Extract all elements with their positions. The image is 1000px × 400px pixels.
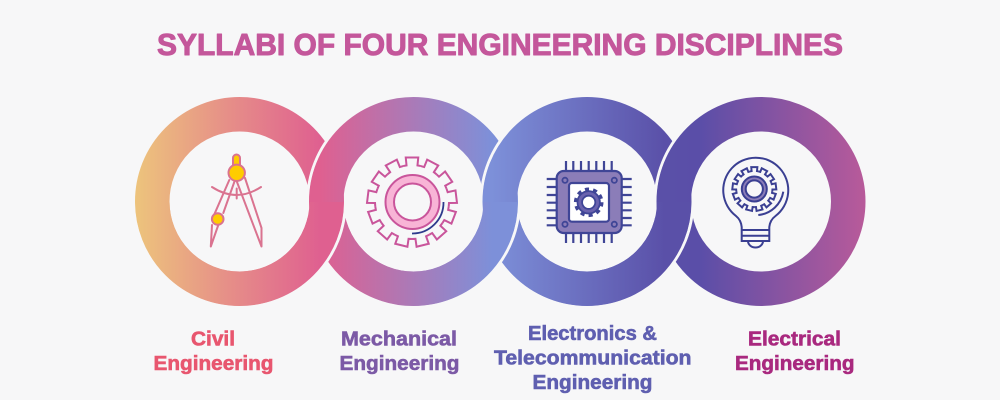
label: civil engineering: [154, 328, 274, 375]
icon: gear: [367, 157, 457, 247]
label: mechanical engineering: Mechanical: [341, 328, 457, 350]
label: electronics and telecommunication engineering: Telecommunication: [494, 348, 692, 370]
icon: drafting compass: [211, 154, 262, 246]
label: electronics and telecommunication engineering: Electronics &: [528, 323, 657, 345]
label: electronics and telecommunication engineering: [494, 323, 692, 394]
ring: electronics engineering: [481, 96, 693, 307]
label: electronics and telecommunication engineering: Engineering: [532, 372, 652, 394]
ring: electrical engineering: [655, 96, 867, 307]
ring overlaps: lower halves woven on top: [135, 202, 693, 306]
label: electrical engineering: Electrical: [748, 328, 841, 350]
label: civil engineering: Civil: [191, 328, 235, 350]
title: SYLLABI OF FOUR ENGINEERING DISCIPLINES: [157, 27, 843, 62]
label: civil engineering: Engineering: [154, 353, 274, 375]
ring: mechanical engineering: [308, 96, 519, 307]
label: mechanical engineering: [340, 328, 460, 375]
ring: civil engineering: [152, 114, 327, 289]
label: electrical engineering: [735, 328, 854, 375]
icon: light bulb with gear: [723, 158, 788, 248]
icon: microchip: [547, 161, 632, 243]
label: mechanical engineering: Engineering: [340, 353, 460, 375]
label: electrical engineering: Engineering: [735, 353, 854, 375]
interlocking rings: [134, 96, 867, 307]
